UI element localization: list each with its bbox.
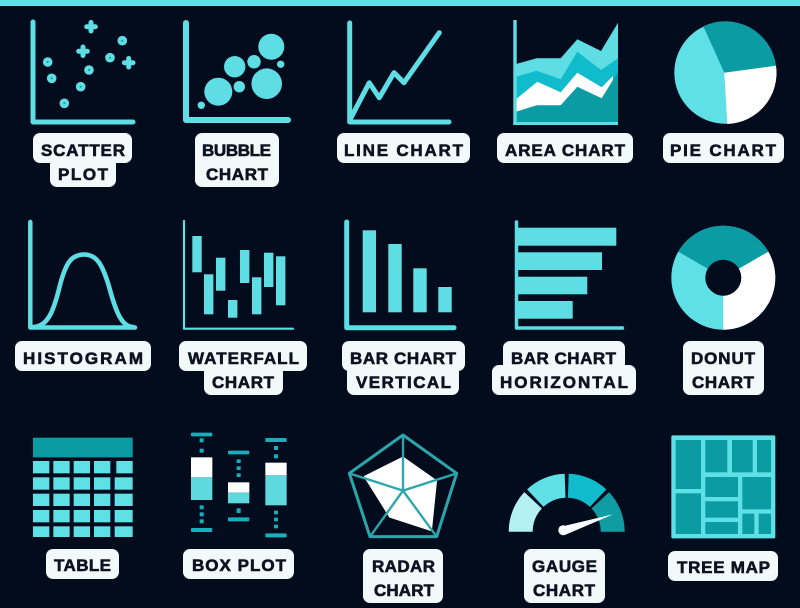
icon: pie chart <box>674 21 777 124</box>
icon: table <box>33 438 133 537</box>
label: tree map: TREE MAP <box>677 558 770 577</box>
icon: donut chart <box>671 226 775 330</box>
icon: tree map <box>671 435 775 538</box>
label: line chart: LINE CHART <box>344 141 464 160</box>
icon: bar chart vertical <box>347 222 454 328</box>
top accent bar <box>0 0 800 6</box>
label: waterfall chart: WATERFALL <box>188 349 299 368</box>
label: bubble chart: BUBBLE <box>202 141 271 160</box>
label: radar chart: CHART <box>374 581 435 600</box>
label: bubble chart <box>195 133 279 187</box>
icon: box plot <box>191 433 287 537</box>
label: donut chart <box>683 341 764 395</box>
label: table <box>46 549 119 579</box>
label: waterfall chart: CHART <box>212 373 275 392</box>
label: bar chart vertical <box>342 341 465 395</box>
label: waterfall chart <box>179 341 307 395</box>
label: area chart <box>497 133 633 163</box>
label: pie chart <box>663 133 784 163</box>
label: pie chart: PIE CHART <box>670 141 777 160</box>
label: radar chart <box>363 549 443 603</box>
icon: histogram <box>30 222 135 328</box>
icon: bubble chart <box>186 23 288 120</box>
label: gauge chart: GAUGE <box>532 557 597 576</box>
icon: gauge chart <box>521 486 613 535</box>
icon: radar chart <box>349 435 457 537</box>
label: area chart: AREA CHART <box>505 141 626 160</box>
label: line chart <box>337 133 470 163</box>
icon: waterfall chart <box>184 221 293 329</box>
label: gauge chart: CHART <box>533 581 596 600</box>
label: donut chart: CHART <box>692 373 755 392</box>
label: radar chart: RADAR <box>372 557 435 576</box>
label: scatter plot: PLOT <box>58 165 109 184</box>
label: scatter plot: SCATTER <box>41 141 125 160</box>
label: gauge chart <box>524 549 605 603</box>
label: histogram: HISTOGRAM <box>23 349 143 368</box>
icon: line chart <box>350 23 449 122</box>
label: tree map <box>668 551 778 581</box>
icon: area chart <box>513 20 618 125</box>
label: table: TABLE <box>54 556 111 575</box>
label: bar chart horizontal: HORIZONTAL <box>500 373 628 392</box>
icon: scatter plot <box>33 22 133 122</box>
icon: bar chart horizontal <box>516 222 622 328</box>
label: bar chart horizontal: BAR CHART <box>511 349 617 368</box>
label: scatter plot <box>33 133 132 187</box>
label: bar chart vertical: VERTICAL <box>356 373 451 392</box>
label: bar chart horizontal <box>492 341 636 395</box>
label: bar chart vertical: BAR CHART <box>350 349 457 368</box>
label: box plot: BOX PLOT <box>192 556 287 575</box>
label: box plot <box>183 549 294 579</box>
label: donut chart: DONUT <box>691 349 756 368</box>
label: histogram <box>15 341 151 371</box>
label: bubble chart: CHART <box>206 165 269 184</box>
